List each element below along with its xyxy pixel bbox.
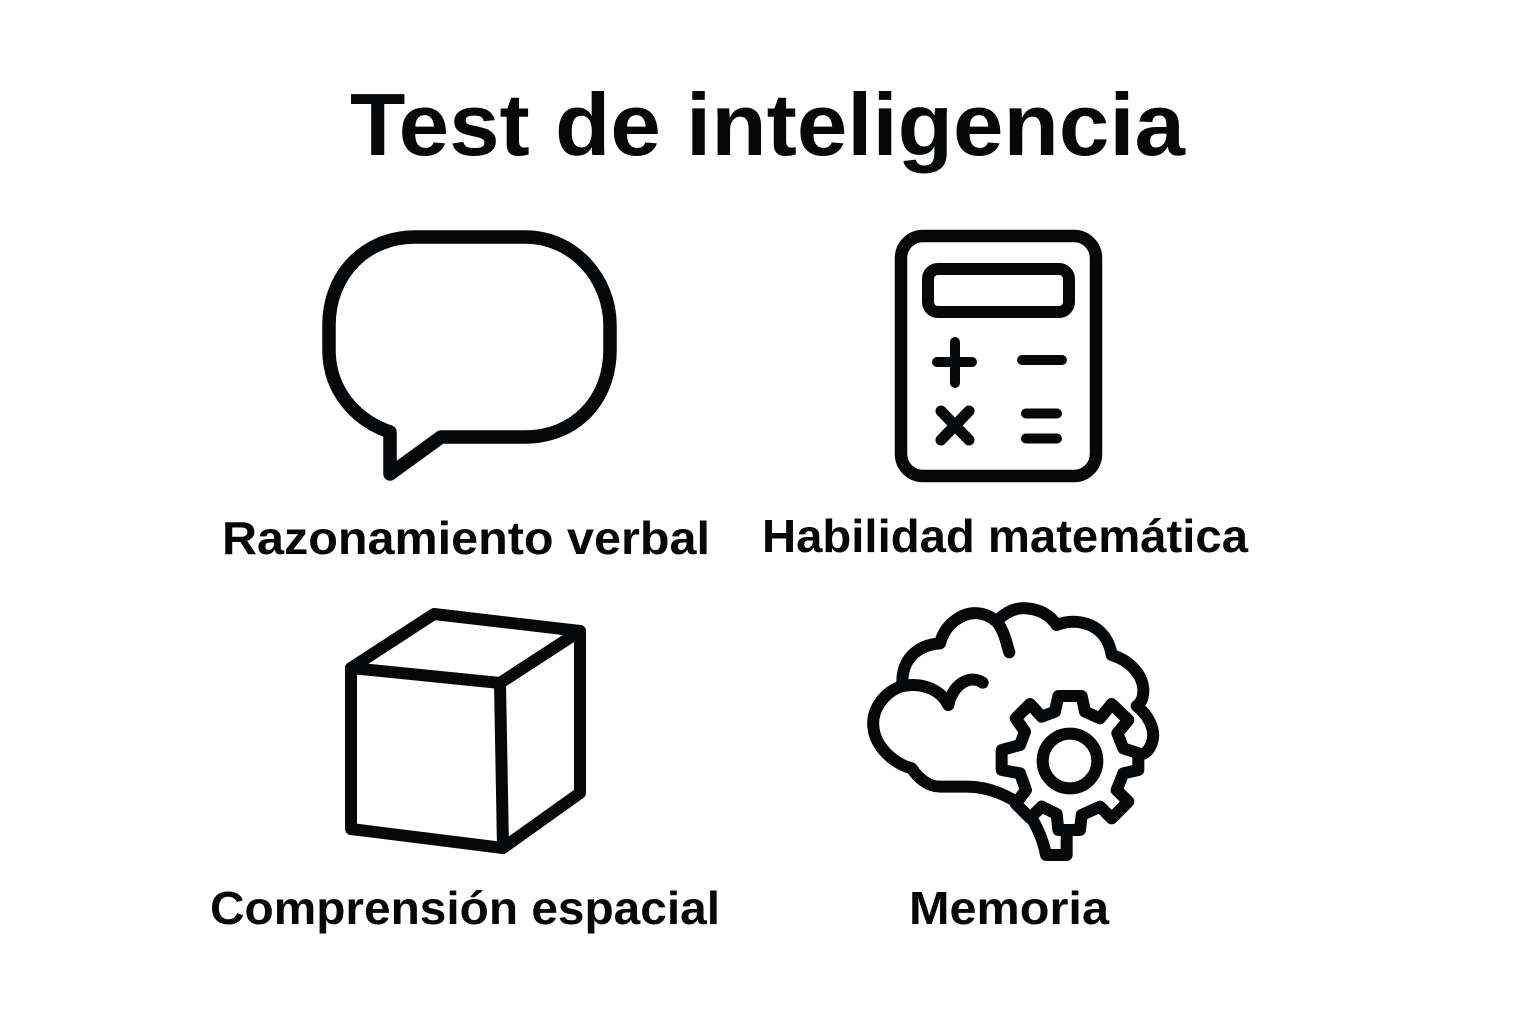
calculator body — [901, 236, 1096, 476]
icon: speech bubble — [329, 237, 610, 474]
icon: cube — [351, 614, 580, 848]
label: memory: Memoria — [909, 882, 1109, 934]
icon: brain with gear — [873, 608, 1153, 855]
label: spatial comprehension: Comprensión espacial — [210, 882, 720, 934]
calculator screen — [928, 269, 1069, 312]
title: Test de inteligencia — [350, 75, 1186, 174]
plus sign — [937, 342, 972, 383]
gear — [1002, 696, 1138, 830]
multiply sign — [941, 411, 969, 440]
label: mathematical ability: Habilidad matemática — [762, 510, 1248, 562]
label: verbal reasoning: Razonamiento verbal — [222, 512, 710, 564]
brain outline — [902, 608, 1153, 755]
equals sign — [1026, 414, 1057, 438]
brain fold left — [948, 680, 983, 705]
lower brain lobe — [873, 685, 1067, 855]
minus sign — [1022, 355, 1062, 365]
icon: calculator — [901, 236, 1096, 476]
gear hub — [1043, 734, 1097, 788]
brain fold right — [997, 622, 1009, 652]
